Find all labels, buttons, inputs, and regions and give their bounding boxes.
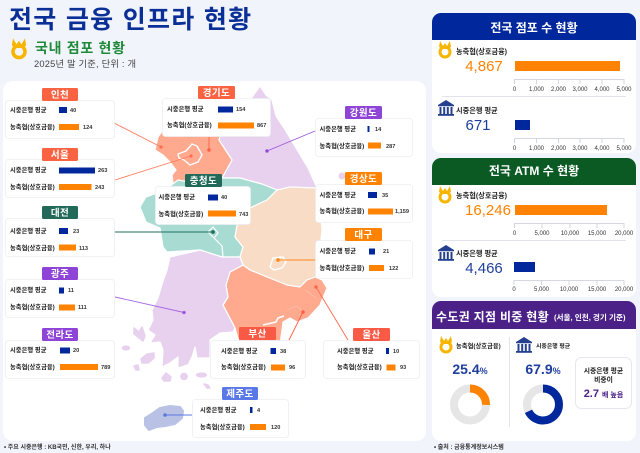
card: Jeju: 제주도 bbox=[226, 388, 254, 400]
card: Gyeonggi: 154 bbox=[236, 107, 246, 113]
value: bank ATMs: 4,466 bbox=[465, 260, 503, 277]
card: Gyeongsang: 농축협(상호금융) bbox=[320, 206, 364, 215]
header bbox=[432, 158, 636, 185]
callout: 2.7 배 높음 bbox=[584, 388, 624, 400]
card: Ulsan: 93 bbox=[400, 365, 406, 371]
card: Ulsan: 10 bbox=[393, 349, 399, 355]
card: Gyeonggi: 농축협(상호금융) bbox=[167, 120, 212, 129]
header: 전국 ATM 수 현황 bbox=[489, 163, 579, 178]
card: Gyeonggi: 867 bbox=[257, 123, 266, 129]
region: Jeolla bbox=[148, 250, 243, 368]
panel: branch count: 농축협(상호금융) bbox=[456, 47, 508, 56]
panel: capital region share bbox=[432, 301, 636, 441]
axis bbox=[513, 224, 634, 237]
card: Busan: 시중은행 평균 bbox=[221, 346, 258, 355]
icon: medal bbox=[439, 41, 451, 57]
boundary: Daejeon south bbox=[214, 238, 223, 257]
icon: medal bbox=[12, 38, 26, 58]
card: Seoul: 시중은행 평균 bbox=[10, 165, 47, 174]
island near Gyeongsang bbox=[338, 172, 346, 180]
callout bbox=[576, 358, 632, 408]
axis: 0 bbox=[513, 87, 517, 93]
axis: 15,000 bbox=[588, 231, 607, 237]
value: bank share: 67.9% bbox=[525, 361, 561, 377]
card: Gangwon: 시중은행 평균 bbox=[320, 124, 356, 133]
icon: medal bbox=[439, 186, 451, 202]
card: Incheon: 인천 bbox=[51, 89, 69, 101]
card: Incheon: 124 bbox=[83, 125, 93, 131]
axis: 10,000 bbox=[561, 231, 580, 237]
card: Jeolla: 전라도 bbox=[46, 330, 74, 341]
section heading: domestic branches: 국내 점포 현황 bbox=[35, 40, 126, 56]
axis: 4,000 bbox=[594, 87, 610, 93]
panel: ATM count: 농축협(상호금융) bbox=[456, 191, 508, 200]
card: Jeolla: 농축협(상호금융) bbox=[10, 362, 55, 371]
card: Gyeongsang: 1,159 bbox=[395, 209, 409, 215]
card: Gyeongsang: 35 bbox=[382, 193, 388, 199]
card: Incheon: 농축협(상호금융) bbox=[10, 122, 55, 131]
card: Jeju: 120 bbox=[271, 425, 280, 431]
axis: 5,000 bbox=[616, 146, 632, 152]
bar: nonghyup branches bbox=[515, 61, 620, 71]
islands bbox=[122, 327, 210, 388]
axis: 0 bbox=[513, 146, 517, 152]
axis: 1,000 bbox=[529, 146, 545, 152]
value: nonghyup branches: 4,867 bbox=[465, 58, 503, 75]
card: Jeju: 시중은행 평균 bbox=[200, 405, 237, 414]
card: Gyeongsang bbox=[316, 172, 412, 222]
card: Incheon: 시중은행 평균 bbox=[10, 105, 47, 114]
leader: Daegu bbox=[277, 259, 315, 261]
card: Seoul: 농축협(상호금융) bbox=[10, 182, 55, 191]
region: Gangwon bbox=[219, 86, 318, 190]
header: (서울, 인천, 경기 기준) bbox=[554, 312, 626, 322]
card: Jeju: 4 bbox=[257, 408, 261, 414]
header bbox=[432, 301, 636, 329]
bar: bank branches bbox=[515, 120, 530, 130]
axis: 5,000 bbox=[616, 87, 632, 93]
section heading: domestic branches: 2025년 말 기준, 단위 : 개 bbox=[34, 58, 136, 69]
card: Gangwon: 강원도 bbox=[350, 107, 377, 119]
card: Ulsan: 농축협(상호금융) bbox=[337, 362, 382, 371]
card: Ulsan: 울산 bbox=[362, 329, 381, 341]
card: Seoul: 263 bbox=[98, 168, 107, 174]
card: Busan bbox=[210, 327, 306, 378]
card: Daegu: 농축협(상호금융) bbox=[320, 263, 364, 272]
axis: 20,000 bbox=[615, 231, 634, 237]
card: Chungcheong: 40 bbox=[221, 195, 227, 201]
bar: bank ATMs bbox=[514, 262, 535, 272]
donut: banks bbox=[527, 388, 559, 420]
axis: 10,000 bbox=[560, 287, 579, 293]
card: Jeolla: 20 bbox=[73, 348, 79, 354]
section heading: domestic branches bbox=[12, 38, 136, 69]
callout: 비중이 bbox=[594, 375, 613, 384]
card: Daejeon: 23 bbox=[73, 229, 79, 235]
card: Seoul: 서울 bbox=[51, 149, 69, 161]
axis: 5,000 bbox=[534, 287, 550, 293]
panel: capital region share: 농축협(상호금융) bbox=[456, 341, 501, 350]
card: Incheon: 40 bbox=[70, 108, 76, 114]
card: Seoul: 243 bbox=[95, 185, 104, 191]
region: Daegu bbox=[270, 257, 286, 270]
card: Gwangju bbox=[6, 267, 114, 318]
value: nonghyup ATMs: 16,246 bbox=[465, 202, 511, 219]
card: Seoul bbox=[6, 148, 114, 198]
axis: 3,000 bbox=[572, 146, 588, 152]
icon: bank bbox=[516, 337, 532, 353]
card: Daejeon: 113 bbox=[79, 246, 88, 252]
callout: 시중은행 평균 bbox=[584, 366, 623, 375]
footnote: source: • 출처 : 금융통계정보시스템 bbox=[434, 443, 504, 451]
card: Gyeonggi: 경기도 bbox=[203, 87, 230, 99]
region: South Gyeongsang bbox=[223, 265, 327, 345]
card: Gangwon: 농축협(상호금융) bbox=[320, 141, 364, 150]
leader: Ulsan bbox=[315, 286, 348, 340]
bar: nonghyup ATMs bbox=[515, 205, 607, 215]
card: Gyeonggi bbox=[162, 86, 270, 136]
card: Jeju: 농축협(상호금융) bbox=[200, 422, 245, 431]
axis bbox=[512, 280, 634, 293]
axis: 2,000 bbox=[551, 146, 567, 152]
card: Busan: 부산 bbox=[248, 328, 267, 340]
icon: bank bbox=[438, 245, 454, 261]
region: Chungcheong bbox=[140, 178, 277, 257]
axis: 20,000 bbox=[615, 287, 634, 293]
axis: 5,000 bbox=[534, 231, 550, 237]
card: Gwangju: 111 bbox=[78, 305, 87, 311]
leader: Gangwon bbox=[266, 131, 315, 152]
card: Busan: 96 bbox=[289, 365, 295, 371]
value: nonghyup share: 25.4% bbox=[452, 361, 488, 377]
card: Daejeon: 시중은행 평균 bbox=[10, 226, 47, 235]
card: Gwangju: 11 bbox=[68, 288, 74, 294]
boundary: Busan bbox=[287, 290, 316, 312]
card: Chungcheong: 농축협(상호금융) bbox=[158, 209, 203, 218]
card: Chungcheong: 충청도 bbox=[190, 175, 217, 187]
card: Gangwon: 287 bbox=[386, 144, 395, 150]
axis: 1,000 bbox=[529, 87, 545, 93]
axis: 2,000 bbox=[551, 87, 567, 93]
panel: branch count bbox=[432, 13, 636, 153]
card: Chungcheong bbox=[156, 174, 250, 224]
axis bbox=[513, 80, 632, 93]
card: Busan: 농축협(상호금융) bbox=[221, 362, 266, 371]
card: Gangwon bbox=[316, 106, 412, 156]
region: Gyeongsang bbox=[235, 187, 322, 287]
leader: Busan bbox=[289, 311, 304, 340]
value: bank branches: 671 bbox=[465, 117, 491, 134]
card: Daegu: 대구 bbox=[354, 229, 373, 241]
leader: Gwangju bbox=[115, 297, 185, 314]
icon: medal bbox=[440, 336, 452, 352]
region: Jeju bbox=[145, 406, 183, 430]
card: Jeolla bbox=[6, 328, 114, 378]
leader: Incheon bbox=[114, 123, 162, 148]
region: Daejeon bbox=[208, 227, 218, 238]
card: Gwangju: 농축협(상호금융) bbox=[10, 302, 55, 311]
card: Daejeon bbox=[6, 206, 114, 256]
card: Daejeon: 농축협(상호금융) bbox=[10, 243, 55, 252]
donut: nonghyup bbox=[454, 388, 486, 420]
card: Jeolla: 시중은행 평균 bbox=[10, 345, 47, 354]
region: Gyeonggi bbox=[155, 100, 232, 184]
card: Gyeonggi: 시중은행 평균 bbox=[167, 104, 204, 113]
panel: capital region share: 시중은행 평균 bbox=[536, 342, 571, 350]
leader: Gyeonggi bbox=[208, 137, 210, 151]
axis: 4,000 bbox=[594, 146, 610, 152]
card: Gangwon: 14 bbox=[375, 127, 382, 133]
card: Daegu: 21 bbox=[383, 249, 389, 255]
card: Gyeongsang: 시중은행 평균 bbox=[320, 190, 356, 199]
card: Daegu: 122 bbox=[389, 266, 398, 272]
axis: 3,000 bbox=[572, 87, 588, 93]
panel: map bbox=[3, 81, 426, 441]
axis: 15,000 bbox=[588, 287, 607, 293]
card: Gwangju: 광주 bbox=[51, 268, 69, 280]
card: Daegu: 시중은행 평균 bbox=[320, 246, 356, 255]
card: Jeju bbox=[192, 387, 288, 438]
axis bbox=[513, 138, 632, 152]
icon: bank bbox=[438, 100, 454, 116]
leader: Daejeon bbox=[114, 231, 214, 233]
header bbox=[432, 13, 636, 40]
card: Daegu bbox=[316, 228, 412, 278]
card: Daejeon: 대전 bbox=[51, 207, 69, 219]
leader: Jeju bbox=[164, 414, 192, 416]
card: Ulsan bbox=[324, 328, 420, 378]
leader: Seoul bbox=[115, 155, 192, 180]
card: Gwangju: 시중은행 평균 bbox=[10, 285, 47, 294]
card: Busan: 38 bbox=[280, 349, 286, 355]
panel: ATM count: 시중은행 평균 bbox=[456, 249, 498, 258]
card: Chungcheong: 시중은행 평균 bbox=[158, 192, 195, 201]
header: 전국 점포 수 현황 bbox=[490, 20, 578, 35]
header: 수도권 지점 비중 현황 bbox=[436, 309, 549, 324]
axis: 0 bbox=[513, 231, 517, 237]
card: Chungcheong: 743 bbox=[239, 212, 248, 218]
panel: branch count: 시중은행 평균 bbox=[456, 106, 498, 115]
footnote: main banks: • 주요 시중은행 : KB국민, 신한, 우리, 하나 bbox=[4, 443, 111, 451]
card: Incheon bbox=[6, 88, 114, 138]
boundary: coast bbox=[263, 316, 284, 325]
card: Jeolla: 789 bbox=[101, 365, 110, 371]
leader lines bbox=[114, 123, 348, 416]
region: Seoul bbox=[178, 144, 202, 165]
title: 전국 금융 인프라 현황 bbox=[9, 6, 252, 34]
panel: ATM count bbox=[432, 158, 636, 297]
map: regions bbox=[122, 86, 346, 430]
card: Ulsan: 시중은행 평균 bbox=[337, 346, 374, 355]
axis: 0 bbox=[512, 287, 516, 293]
card: Gyeongsang: 경상도 bbox=[350, 173, 377, 185]
